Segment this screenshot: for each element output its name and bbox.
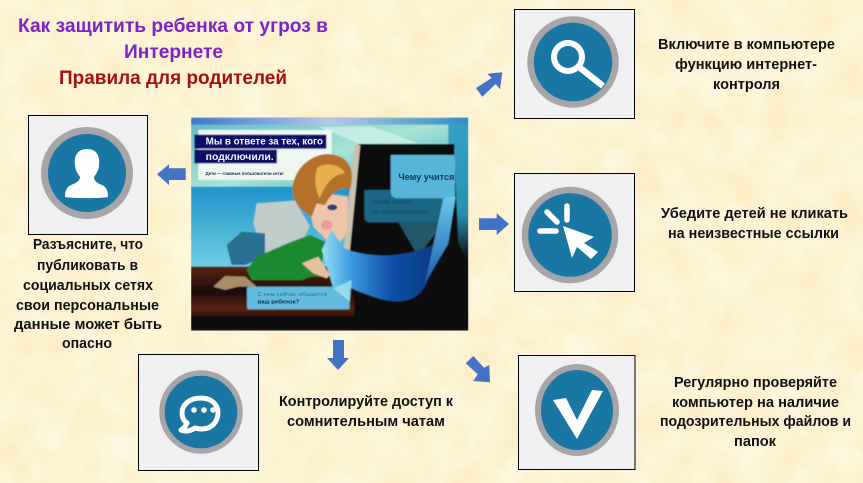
- panel: magnifier icon: [514, 10, 634, 118]
- arrow: to checkmark: [466, 356, 490, 382]
- central illustration: child at the computer: подключили.: [206, 152, 274, 163]
- icon: check mark: [553, 390, 603, 439]
- text: personal data advice: опасно: [62, 335, 112, 352]
- chair: [253, 201, 310, 257]
- blue swoop arrow: [322, 230, 438, 301]
- arrow: down to chat: [327, 340, 349, 370]
- text: unknown links: на неизвестные ссылки: [668, 225, 839, 242]
- text: personal data advice: социальных сетях: [23, 277, 154, 294]
- central illustration: child at the computer: Мы в ответе за тех, кого: [206, 137, 323, 148]
- text: check files: компьютер на наличие: [672, 394, 839, 411]
- desk: [191, 267, 354, 317]
- text: personal data advice: публиковать в: [37, 257, 138, 274]
- central illustration: child at the computer: С кем сейчас общается: [258, 291, 327, 298]
- text: check files: Регулярно проверяйте: [674, 374, 837, 391]
- title: Как защитить ребенка от угроз в: [18, 16, 328, 37]
- title: [18, 16, 328, 89]
- text: check files: [660, 374, 851, 450]
- arrow: to cursor: [479, 213, 509, 235]
- central illustration: child at the computer: Дети — главные пользователи сети!: [206, 171, 284, 176]
- panel: person icon: [28, 116, 148, 234]
- text: internet control: Включите в компьютере: [658, 36, 835, 53]
- arrow: to magnifier: [476, 72, 502, 97]
- panel: chat icon: [138, 354, 258, 470]
- icon: magnifier: [554, 43, 603, 86]
- central illustration: child at the computer: ваш ребенок?: [258, 298, 300, 305]
- caption bubble: child contacts: [247, 287, 350, 309]
- central illustration: child at the computer: [191, 117, 468, 331]
- title: Правила для родителей: [59, 68, 287, 89]
- text: unknown links: Убедите детей не кликать: [661, 205, 848, 222]
- central illustration: child at the computer: Чему учится: [398, 172, 454, 182]
- title: Интернете: [124, 42, 223, 63]
- sweater: [247, 235, 328, 280]
- face and hair: [310, 193, 348, 247]
- text: dubious chats: [279, 393, 453, 430]
- icon: person silhouette: [65, 149, 108, 198]
- panel: click cursor icon: [514, 174, 634, 292]
- text: personal data advice: свои персональные: [16, 297, 159, 314]
- icon: cursor with click rays: [540, 206, 598, 259]
- central illustration: child at the computer: он просматривает: [373, 209, 429, 216]
- central illustration: child at the computer: Какие сайты: [373, 198, 411, 206]
- text: personal data advice: данные может быть: [14, 316, 162, 333]
- text: personal data advice: [14, 236, 162, 352]
- text: dubious chats: Контролируйте доступ к: [279, 393, 453, 410]
- text: personal data advice: Разъясните, что: [33, 236, 143, 253]
- arrow: to person: [157, 164, 186, 185]
- text: internet control: контроля: [713, 76, 780, 93]
- text: internet control: [658, 36, 835, 93]
- panel: checkmark icon: [518, 356, 635, 470]
- text: internet control: функцию интернет-: [675, 56, 817, 73]
- icon: speech bubble: [181, 398, 218, 431]
- text: check files: подозрительных файлов и: [660, 413, 851, 430]
- text: dubious chats: сомнительным чатам: [287, 413, 445, 430]
- text: check files: папок: [734, 433, 776, 450]
- poster panel: [198, 130, 332, 180]
- screen bubbles: [398, 222, 438, 252]
- monitor: [348, 144, 468, 331]
- text: unknown links: [661, 205, 848, 242]
